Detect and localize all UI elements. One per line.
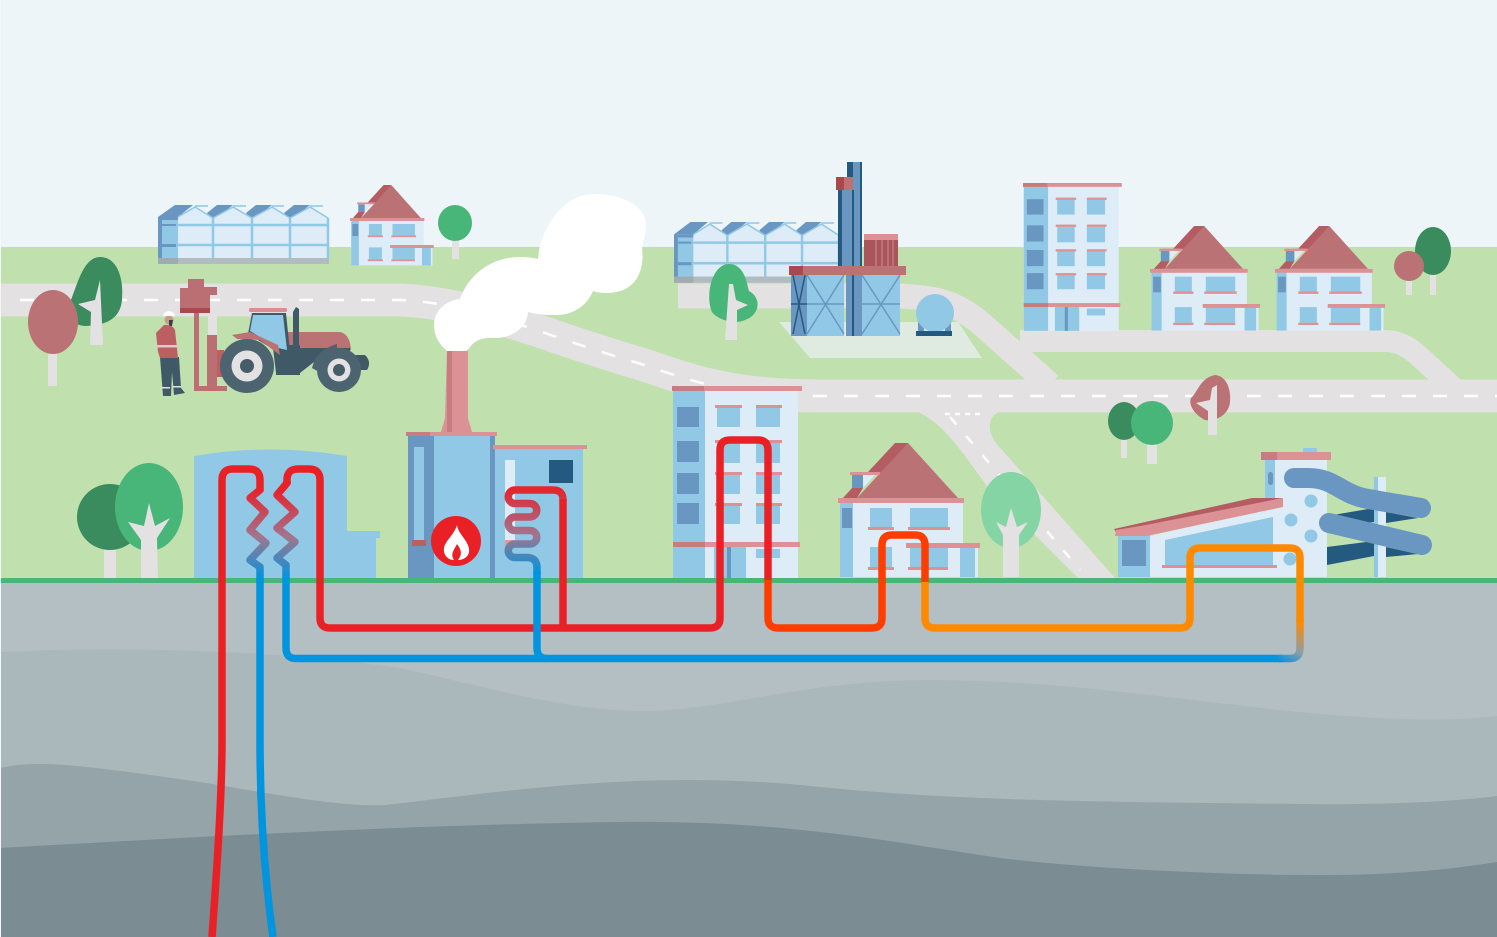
pipe: cooled return bend <box>1278 620 1300 658</box>
pipe: boiler feed, hot <box>559 499 567 628</box>
tree: dark and green left foreground <box>77 463 183 578</box>
water park with slides <box>1114 448 1422 577</box>
trees: far right pair <box>1394 227 1451 295</box>
house: back right one <box>1150 226 1260 331</box>
sky <box>0 0 1497 248</box>
pipe: return line, cold <box>286 578 1282 658</box>
house: back left <box>350 185 434 265</box>
smoke plume <box>434 194 646 351</box>
house: back right two <box>1275 226 1385 331</box>
drilling rig <box>180 279 227 391</box>
ground line <box>0 578 1497 583</box>
greenhouse centre <box>674 222 840 283</box>
tree: green at greenhouse <box>709 264 758 340</box>
trees: centre pair <box>1108 401 1173 464</box>
left edge highlight <box>0 0 1 937</box>
grass field <box>0 247 1497 580</box>
icon: flame on red badge <box>431 516 481 566</box>
tree: pink centre <box>1190 375 1230 435</box>
pipe: supply line, red <box>287 440 768 628</box>
pipe: exchanger zigzag two <box>277 481 295 580</box>
tree: small green back <box>438 205 472 259</box>
energy plant <box>789 162 906 336</box>
greenhouse left <box>158 205 329 264</box>
house: foreground <box>838 443 980 577</box>
pipe: supply line, orange <box>925 548 1300 628</box>
pipe: boiler coil <box>508 490 563 574</box>
pipe: supply line, orange-red <box>768 535 925 628</box>
underground strata <box>0 583 1497 937</box>
plant forecourt <box>779 322 982 358</box>
tree: dark green left <box>66 257 122 345</box>
tree: light green <box>981 472 1041 577</box>
heat exchanger building <box>194 450 380 578</box>
pipe: injection well, cold <box>260 578 273 937</box>
tower block: foreground <box>672 386 802 578</box>
tower block: back right <box>1023 183 1122 331</box>
tree: pink left <box>28 290 78 386</box>
pipe: exchanger zigzag one <box>250 489 266 580</box>
boiler house <box>406 432 587 578</box>
tractor <box>220 307 369 393</box>
pipe: production well, hot <box>212 469 260 937</box>
worker <box>156 311 185 396</box>
chimney <box>441 350 472 432</box>
road network <box>0 296 1497 578</box>
pipe: boiler feed, cold <box>537 572 547 658</box>
pipes: geothermal network <box>212 440 1300 937</box>
spherical tank <box>916 294 954 336</box>
